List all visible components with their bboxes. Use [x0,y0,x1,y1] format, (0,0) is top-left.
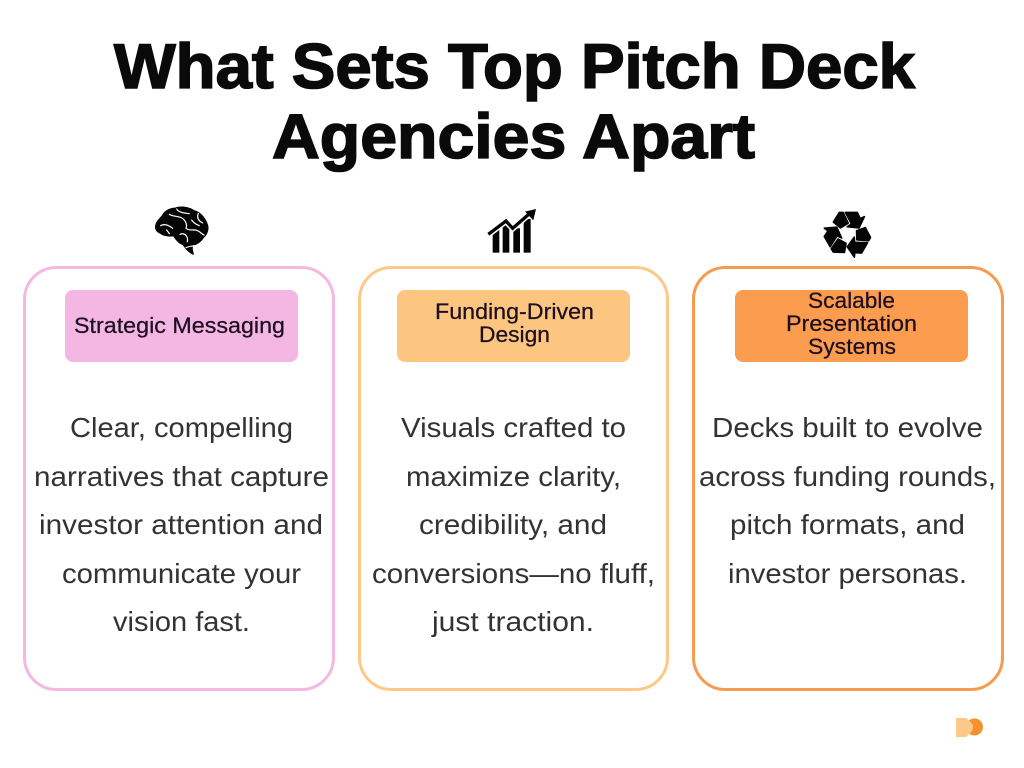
icon: brand logo [956,718,983,737]
panel: funding-driven design [360,268,668,690]
heading: scalable presentation systems [735,288,968,362]
heading: scalable presentation systems: Scalable [808,288,895,313]
text: funding-driven design description: just traction. [431,606,594,637]
heading: scalable presentation systems: Systems [808,334,896,359]
heading: funding-driven design: Funding-Driven [435,299,594,324]
text: scalable presentation systems description: pitch formats, and [730,509,965,540]
title: Agencies Apart [272,102,755,172]
title [114,32,916,172]
heading: scalable presentation systems: Presentation [786,311,917,336]
heading: strategic messaging [65,290,298,362]
heading: strategic messaging: Strategic Messaging [74,313,285,338]
text: scalable presentation systems description: investor personas. [728,558,967,589]
text: strategic messaging description: communicate your [62,558,301,589]
text: funding-driven design description: Visuals crafted to [401,412,626,443]
icon: brain [155,207,209,255]
text: strategic messaging description: vision fast. [113,606,250,637]
text: strategic messaging description: investor attention and [39,509,323,540]
heading: funding-driven design: Design [479,322,550,347]
text: strategic messaging description: Clear, compelling [70,412,293,443]
text: strategic messaging description: narratives that capture [34,461,329,492]
text: scalable presentation systems description: Decks built to evolve [712,412,983,443]
icon: recycling symbol [821,212,874,259]
text: scalable presentation systems description [699,412,996,589]
text: funding-driven design description: maximize clarity, [406,461,621,492]
title: What Sets Top Pitch Deck [114,32,916,102]
panel: scalable presentation systems [694,268,1002,690]
text: funding-driven design description [372,412,655,637]
text: funding-driven design description: credibility, and [419,509,607,540]
panel: strategic messaging [24,268,334,690]
text: strategic messaging description [34,412,329,637]
text: funding-driven design description: conversions—no fluff, [372,558,655,589]
icon: growth chart [488,209,536,253]
heading: funding-driven design [397,290,630,362]
text: scalable presentation systems description: across funding rounds, [699,461,996,492]
